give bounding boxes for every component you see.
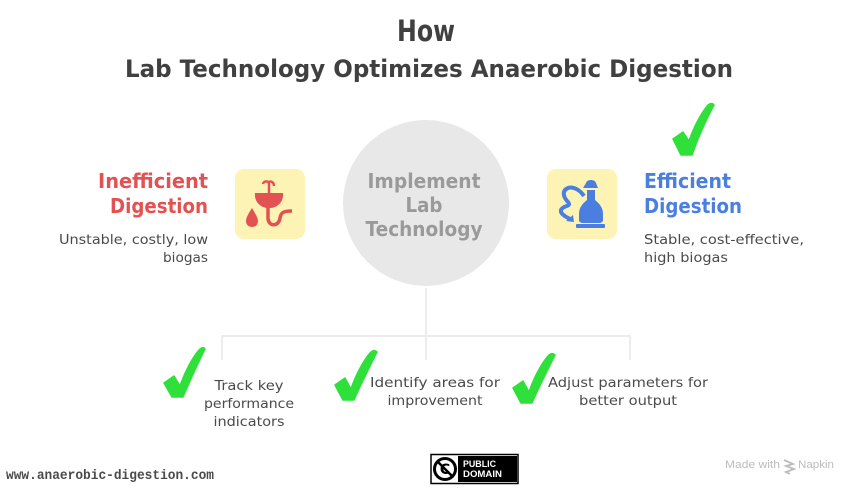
label xyxy=(548,375,708,409)
description: inefficient: biogas xyxy=(163,250,208,266)
made with napkin: Made with xyxy=(725,459,780,471)
icon: check mark top xyxy=(673,104,714,155)
label: Track key xyxy=(213,378,284,394)
public domain badge: PUBLIC xyxy=(463,459,496,470)
public domain badge: DOMAIN xyxy=(463,469,502,480)
label xyxy=(204,378,294,430)
description: efficient xyxy=(644,232,804,266)
heading: efficient digestion: Efficient xyxy=(644,169,731,193)
made with napkin: Napkin xyxy=(798,459,834,471)
description: efficient: high biogas xyxy=(644,250,728,266)
panel: efficient digestion xyxy=(547,104,804,266)
title xyxy=(125,14,733,83)
heading: inefficient digestion: Digestion xyxy=(110,194,208,218)
public domain badge: C xyxy=(440,462,450,478)
heading: inefficient digestion: Inefficient xyxy=(98,169,208,193)
label: improvement xyxy=(388,393,482,409)
central circle: implement lab technology: Implement xyxy=(368,169,481,193)
website url: www.anaerobic-digestion.com xyxy=(6,468,214,484)
made with napkin xyxy=(725,459,834,474)
label: indicators xyxy=(214,414,284,430)
icon: flask with tube xyxy=(547,169,617,239)
title: Lab Technology Optimizes Anaerobic Digestion xyxy=(125,55,733,83)
label: better output xyxy=(579,393,677,409)
heading: efficient digestion: Digestion xyxy=(644,194,742,218)
central circle: implement lab technology: Lab xyxy=(406,193,442,217)
heading: efficient digestion xyxy=(644,169,742,218)
central circle: implement lab technology: Technology xyxy=(366,217,482,241)
icon: check mark xyxy=(164,348,205,397)
panel: inefficient digestion xyxy=(59,169,305,266)
step: identify areas for improvement xyxy=(335,351,501,409)
title: How xyxy=(397,14,455,48)
label: Adjust parameters for xyxy=(548,375,708,391)
description: inefficient xyxy=(59,232,208,266)
step: adjust parameters for better output xyxy=(513,354,708,409)
heading: inefficient digestion xyxy=(98,169,208,218)
description: inefficient: Unstable, costly, low xyxy=(59,232,208,248)
label xyxy=(370,375,501,409)
label: Identify areas for xyxy=(370,375,501,391)
connector lines xyxy=(222,288,630,360)
icon: check mark xyxy=(513,354,555,403)
description: efficient: Stable, cost-effective, xyxy=(644,232,804,248)
icon: leaking sink xyxy=(235,169,305,239)
public domain badge xyxy=(431,454,518,484)
step: track key performance indicators xyxy=(164,348,294,430)
central circle: implement lab technology xyxy=(343,120,509,286)
label: performance xyxy=(204,396,294,412)
icon: check mark xyxy=(335,351,377,400)
